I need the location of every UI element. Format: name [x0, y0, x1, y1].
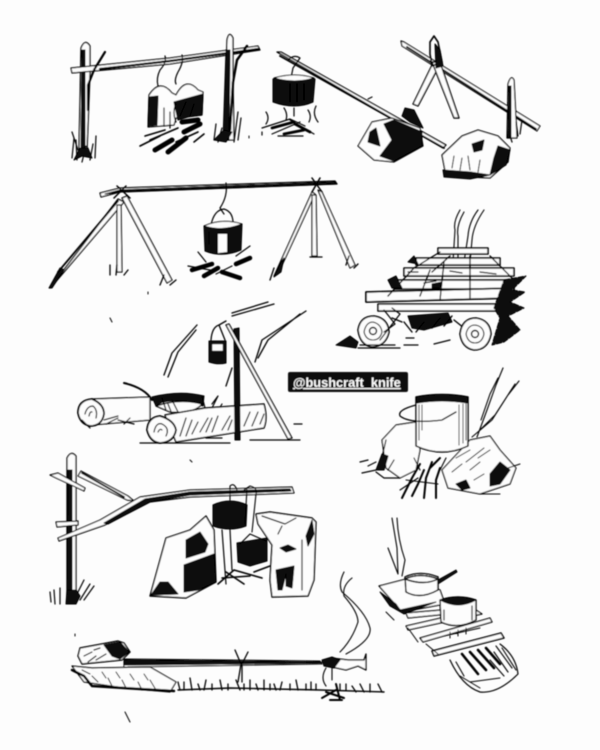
watermark label — [288, 372, 408, 392]
scene: horizontal pole on two tripods with hanging pot — [49, 178, 358, 288]
scene: fish on spit over ground fire — [72, 572, 384, 700]
scene: crossbar between two forked posts with two pots — [71, 34, 260, 162]
scene: log-supported grid fire with smoke — [336, 210, 526, 350]
scene: pot on two rocks with fire — [360, 368, 520, 498]
scene: pot on sloped pole weighted by rocks — [262, 36, 540, 179]
speck marks — [75, 136, 249, 722]
scene: pan and pot on stick grid over pit — [379, 518, 518, 692]
scene: two logs with pan and tripod pot hanger — [78, 302, 306, 443]
scene: forked branch pole with pots over stone fireplace — [50, 453, 316, 604]
watermark label: @bushcraft_knife — [293, 375, 401, 390]
